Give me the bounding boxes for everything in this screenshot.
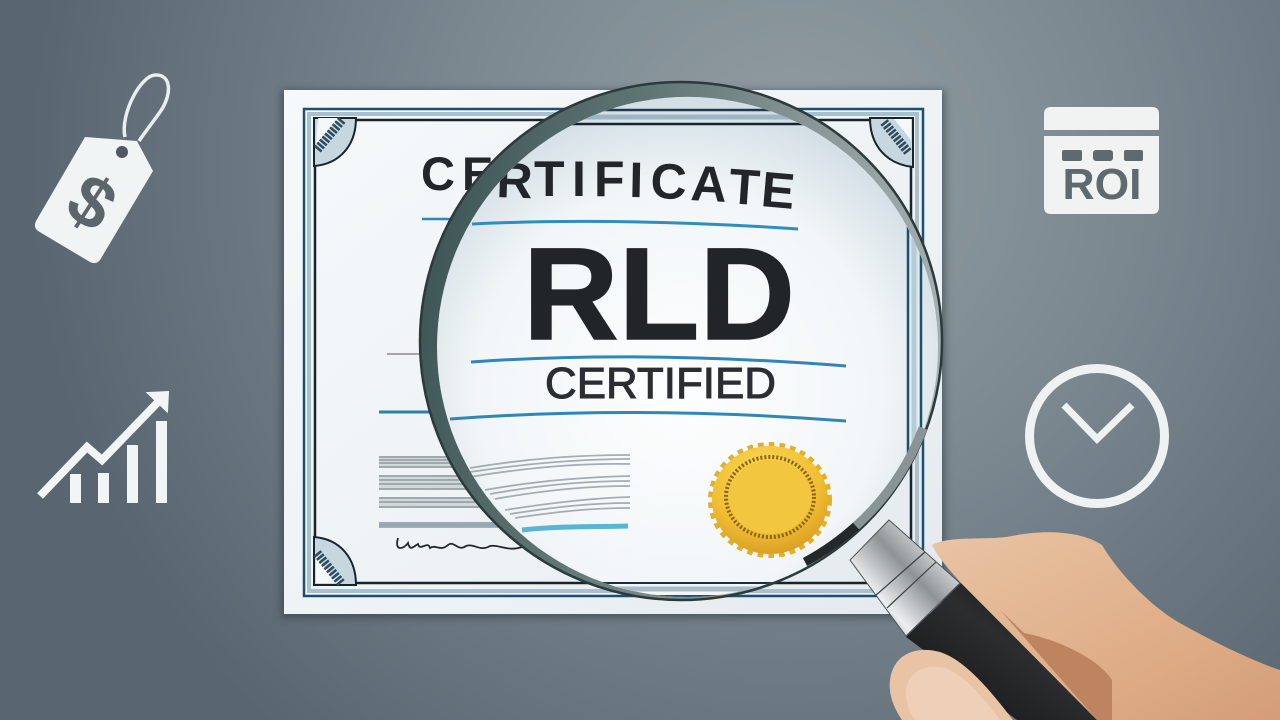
certificate border <box>304 109 923 596</box>
rule under heading <box>472 221 798 229</box>
panel: certificate <box>281 90 945 618</box>
icon: clock <box>1030 368 1164 504</box>
corner ornament: bottom left <box>314 537 356 585</box>
corner ornament: top left <box>314 118 356 166</box>
corner ornament: top right <box>870 118 913 167</box>
dollar symbol: $ <box>53 158 130 247</box>
rule: lower left <box>379 410 430 414</box>
magnified heading: RTIFICATE <box>496 151 797 220</box>
metal ferrule <box>850 520 960 636</box>
finger shadow <box>1000 610 1112 720</box>
ferrule rings <box>875 552 936 608</box>
gold seal <box>712 446 828 554</box>
certified label: CERTIFIED <box>545 359 776 408</box>
magnified text lines <box>470 455 630 518</box>
lens contents <box>420 108 923 596</box>
thumb <box>890 650 1013 720</box>
thumbnail <box>906 667 1000 720</box>
lens rim <box>420 82 942 600</box>
hand holding magnifier <box>890 532 1280 720</box>
signature tick line <box>387 353 421 355</box>
rule below certified <box>450 412 846 421</box>
rim grip joint <box>805 526 856 562</box>
text block lines left <box>379 456 510 527</box>
icon: price tag <box>35 75 168 263</box>
rule: upper left <box>422 218 450 220</box>
magnifying glass lens <box>420 97 938 597</box>
magnifier handle <box>850 520 1097 720</box>
magnified border <box>572 108 922 597</box>
ROI label: ROI <box>1062 160 1142 209</box>
black grip <box>906 583 1097 720</box>
signature <box>397 538 522 549</box>
rim lower right band <box>856 428 923 526</box>
finger and palm <box>932 532 1280 720</box>
blue smudge line <box>522 526 628 530</box>
icon: growth chart <box>40 392 168 503</box>
heading fragment outside lens: CE <box>421 147 493 200</box>
rule above certified <box>471 357 846 366</box>
RLD title: RLD <box>523 220 795 367</box>
icon: ROI calendar <box>1044 107 1159 214</box>
